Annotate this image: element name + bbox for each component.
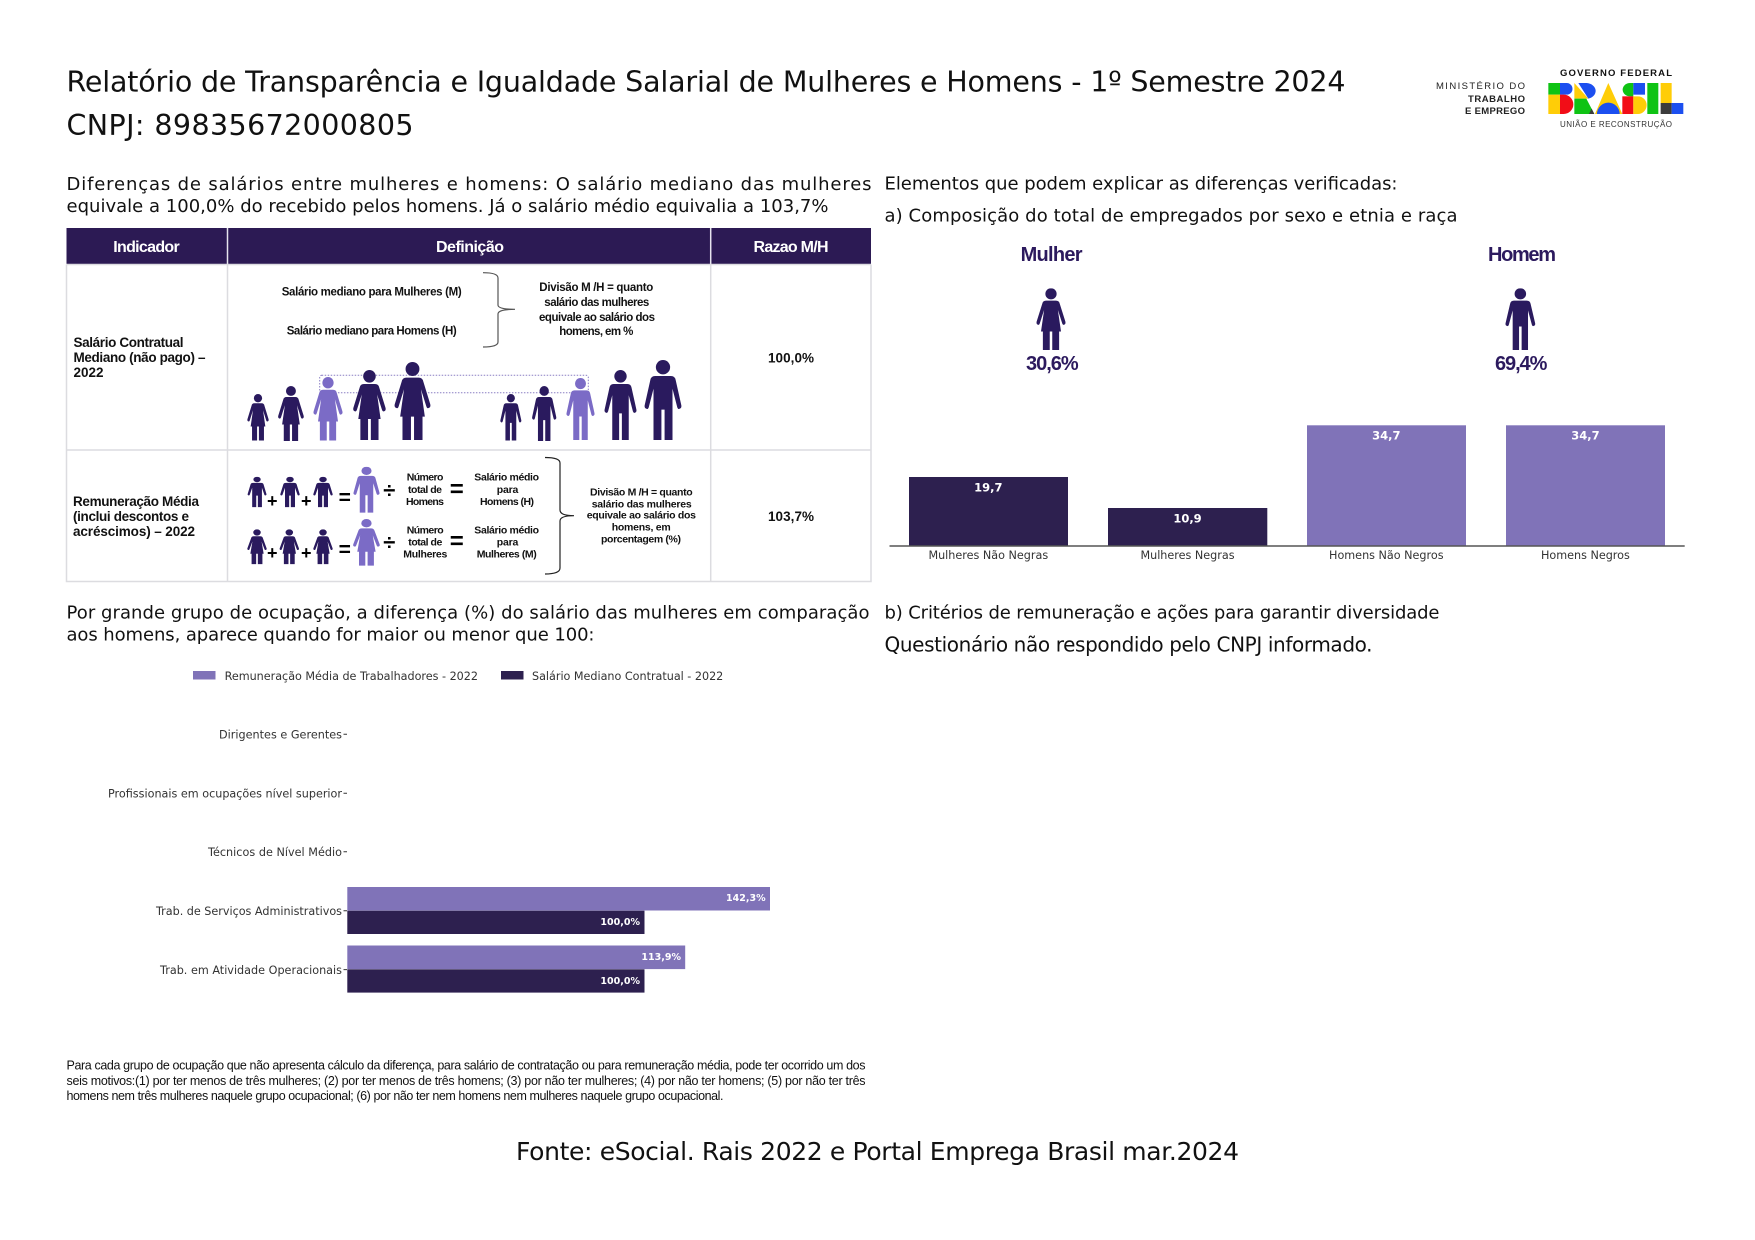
value labels: 19,7 bbox=[974, 481, 1002, 495]
average women label: para bbox=[497, 537, 519, 549]
bars bbox=[909, 425, 1665, 546]
total women label bbox=[403, 524, 447, 561]
average men label bbox=[474, 472, 539, 508]
label: Homem bbox=[1488, 244, 1556, 266]
ministry name: MINISTÉRIO DO bbox=[1436, 81, 1525, 92]
row 1 division note: equivale ao salário dos bbox=[539, 312, 655, 324]
category labels bbox=[108, 728, 342, 977]
bars: administrative services bbox=[347, 887, 770, 934]
row 2 label bbox=[73, 494, 199, 539]
ministry name: E EMPREGO bbox=[1465, 106, 1525, 117]
government label: GOVERNO FEDERAL bbox=[1560, 68, 1672, 79]
footnote bbox=[66, 1058, 865, 1103]
total men label: Homens bbox=[406, 496, 444, 508]
bars: operational activity: 100,0% bbox=[600, 976, 640, 987]
logo: Ministério do Trabalho e Emprego, Governo Federal bbox=[1436, 68, 1683, 129]
heading: composition: a) Composição do total de empregados por sexo e etnia e raça bbox=[884, 206, 1458, 227]
icon: woman bbox=[1036, 288, 1066, 350]
operators: + bbox=[267, 543, 278, 563]
operators: + bbox=[301, 491, 312, 511]
title: Relatório de Transparência e Igualdade Salarial de Mulheres e Homens - 1º Semestre 2024 bbox=[66, 66, 1346, 98]
row 2 division note: salário das mulheres bbox=[592, 498, 692, 510]
heading: explanatory elements: Elementos que podem explicar as diferenças verificadas: bbox=[884, 174, 1398, 194]
axis labels: Mulheres Não Negras bbox=[928, 549, 1048, 562]
operators: = bbox=[450, 528, 464, 555]
axis labels bbox=[928, 549, 1630, 562]
chart: composition by sex and race bbox=[890, 425, 1685, 562]
axis labels: Homens Negros bbox=[1541, 549, 1630, 562]
text block: salary difference summary bbox=[66, 174, 871, 217]
average men label: para bbox=[497, 484, 519, 496]
footnote: homens nem três mulheres naquele grupo ocupacional; (6) por não ter nem homens nem mulheres naquele grupo ocupacional. bbox=[66, 1089, 724, 1103]
axis labels: Homens Não Negros bbox=[1329, 549, 1444, 562]
icons: men ordered by salary bbox=[500, 360, 681, 441]
row 1 label: Mediano (não pago) – bbox=[74, 350, 206, 365]
row 2 division note: Divisão M /H = quanto bbox=[590, 487, 693, 499]
ministry name bbox=[1436, 81, 1525, 117]
value labels: 34,7 bbox=[1571, 428, 1600, 442]
row 2 division note: homens, em bbox=[612, 521, 671, 533]
total men label bbox=[406, 472, 444, 508]
category labels: Técnicos de Nível Médio bbox=[207, 846, 342, 859]
footnote: Para cada grupo de ocupação que não apresenta cálculo da diferença, para salário de contratação ou para remuneração média, pode ter ocorrido um dos bbox=[66, 1058, 865, 1072]
row 1 label: 2022 bbox=[74, 365, 104, 380]
category labels: Profissionais em ocupações nível superior bbox=[108, 788, 342, 800]
chart: occupation group bars bbox=[108, 670, 770, 993]
row 1 brace bbox=[483, 273, 515, 347]
percentage: 69,4% bbox=[1495, 353, 1548, 375]
total women label: Número bbox=[407, 524, 444, 536]
operators: = bbox=[339, 538, 351, 562]
row 2 division note: equivale ao salário dos bbox=[587, 510, 696, 522]
row 1 division note: salário das mulheres bbox=[544, 297, 649, 309]
average women label bbox=[474, 524, 539, 561]
row 1 definition texts: Salário mediano para Mulheres (M) bbox=[282, 287, 462, 299]
text block: occupation intro: Por grande grupo de ocupação, a diferença (%) do salário das mulheres em comparação bbox=[66, 602, 870, 624]
bars: administrative services: 100,0% bbox=[600, 917, 640, 928]
icon: man bbox=[1505, 288, 1535, 350]
row 1 definition texts bbox=[282, 287, 462, 338]
average women label: Salário médio bbox=[474, 524, 539, 536]
operators bbox=[267, 476, 464, 511]
title bbox=[66, 66, 1346, 142]
legend bbox=[193, 670, 723, 683]
axis labels: Mulheres Negras bbox=[1140, 549, 1235, 562]
row 1 division note: Divisão M /H = quanto bbox=[539, 282, 653, 294]
total women label: total de bbox=[408, 537, 442, 549]
operators: ÷ bbox=[383, 530, 395, 555]
table header: Definição bbox=[436, 239, 504, 256]
row 2 division note: porcentagem (%) bbox=[601, 533, 681, 545]
icons: women ordered by salary bbox=[247, 362, 430, 441]
average women label: Mulheres (M) bbox=[477, 549, 537, 561]
title: CNPJ: 89835672000805 bbox=[66, 109, 414, 142]
average men label: Salário médio bbox=[474, 472, 539, 484]
ministry name: TRABALHO bbox=[1468, 94, 1525, 105]
table header bbox=[66, 228, 871, 264]
operators bbox=[267, 528, 464, 563]
total men label: Número bbox=[407, 472, 443, 484]
text block: salary difference summary: equivale a 100,0% do recebido pelos homens. Já o salário médio equivalia a 103,7% bbox=[66, 196, 828, 217]
row 2 label: Remuneração Média bbox=[73, 494, 199, 509]
formula: men average bbox=[248, 467, 539, 513]
value labels: 10,9 bbox=[1173, 511, 1202, 525]
row 1 ratio: 100,0% bbox=[768, 351, 814, 366]
category labels: Dirigentes e Gerentes bbox=[219, 728, 342, 742]
row 1 label: Salário Contratual bbox=[74, 335, 184, 350]
category labels: Trab. em Atividade Operacionais bbox=[159, 964, 342, 977]
total men label: total de bbox=[408, 484, 442, 496]
text block: salary difference summary: Diferenças de salários entre mulheres e homens: O salário mediano das mulheres bbox=[66, 174, 871, 195]
text block: questionnaire status: Questionário não respondido pelo CNPJ informado. bbox=[884, 633, 1372, 657]
median highlight box bbox=[320, 375, 588, 393]
heading: criteria: b) Critérios de remuneração e ações para garantir diversidade bbox=[884, 602, 1440, 624]
text block: occupation intro bbox=[66, 602, 870, 646]
row 1 definition texts: Salário mediano para Homens (H) bbox=[287, 326, 457, 338]
bars: administrative services: 142,3% bbox=[726, 893, 766, 904]
operators: = bbox=[450, 476, 464, 503]
row 2 brace bbox=[545, 458, 574, 574]
row 1 division note bbox=[539, 282, 655, 338]
source line: Fonte: eSocial. Rais 2022 e Portal Emprega Brasil mar.2024 bbox=[516, 1137, 1239, 1166]
table header: Razao M/H bbox=[754, 239, 828, 256]
panel: women share bbox=[1021, 244, 1083, 375]
operators: + bbox=[267, 491, 278, 511]
legend: Remuneração Média de Trabalhadores - 2022 bbox=[225, 670, 478, 683]
men icons bbox=[248, 467, 380, 513]
formula: women average bbox=[247, 519, 539, 566]
value labels: 34,7 bbox=[1372, 428, 1400, 442]
row 1 division note: homens, em % bbox=[559, 326, 633, 338]
row 2 label: acréscimos) – 2022 bbox=[73, 524, 195, 539]
row 2 label: (inclui descontos e bbox=[73, 509, 189, 524]
table header: Indicador bbox=[113, 239, 180, 256]
row 2 division note bbox=[587, 487, 696, 545]
percentage: 30,6% bbox=[1026, 353, 1079, 375]
operators: + bbox=[301, 543, 312, 563]
row 2 ratio: 103,7% bbox=[768, 509, 814, 524]
total women label: Mulheres bbox=[403, 549, 447, 561]
legend: Salário Mediano Contratual - 2022 bbox=[532, 670, 723, 683]
logo tagline: UNIÃO E RECONSTRUÇÃO bbox=[1560, 120, 1672, 129]
row 1 label bbox=[74, 335, 206, 380]
panel: indicators table bbox=[66, 228, 871, 582]
category labels: Trab. de Serviços Administrativos bbox=[155, 905, 342, 918]
footnote: seis motivos:(1) por ter menos de três mulheres; (2) por ter menos de três homens; (3) por não ter mulheres; (4) por não ter homens; (5) por não ter três bbox=[66, 1074, 865, 1088]
panel: men share bbox=[1488, 244, 1556, 375]
bars: operational activity bbox=[347, 946, 685, 993]
label: Mulher bbox=[1021, 244, 1083, 266]
value labels bbox=[974, 428, 1600, 525]
Brasil colored wordmark bbox=[1548, 83, 1683, 114]
operators: ÷ bbox=[383, 478, 395, 503]
text block: occupation intro: aos homens, aparece quando for maior ou menor que 100: bbox=[66, 624, 594, 646]
bars: operational activity: 113,9% bbox=[641, 952, 681, 963]
average men label: Homens (H) bbox=[480, 496, 534, 508]
operators: = bbox=[339, 486, 351, 510]
women icons bbox=[247, 519, 380, 566]
